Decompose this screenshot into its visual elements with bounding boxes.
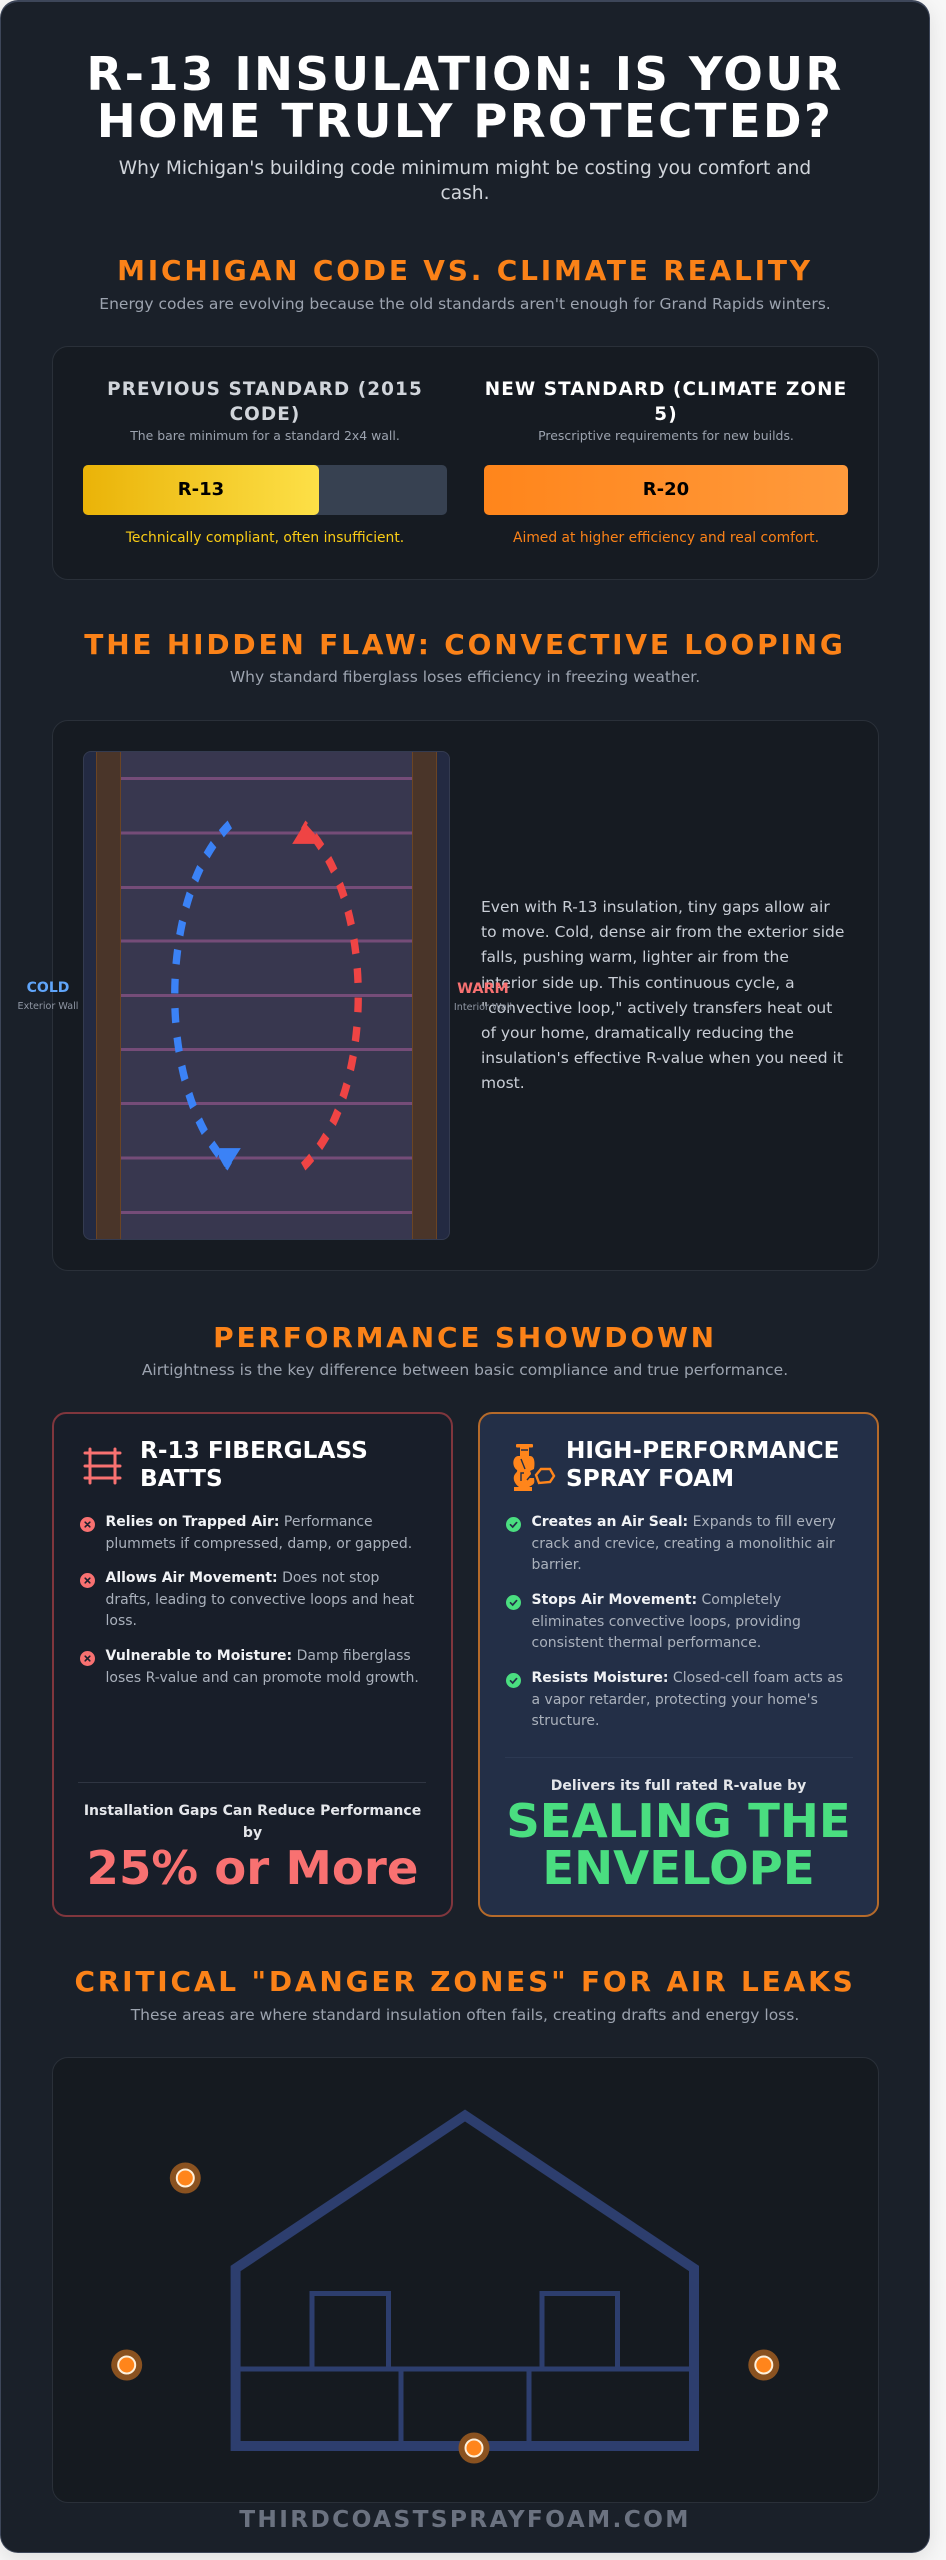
panel: fiberglass card	[52, 1412, 453, 1917]
fiberglass point 1	[80, 1514, 412, 1552]
fiberglass point 2	[80, 1570, 414, 1629]
exterior stud	[96, 751, 121, 1242]
previous standard description: The bare minimum for a standard 2x4 wall.	[130, 428, 400, 443]
leak marker: attic	[170, 2162, 201, 2194]
icon: x mark	[80, 1573, 95, 1588]
fiberglass callout label	[84, 1803, 421, 1841]
interior stud	[412, 751, 437, 1242]
point text: loses R-value and can promote mold growth.	[106, 1670, 419, 1686]
fiberglass card title: BATTS	[140, 1465, 223, 1492]
fiberglass card title	[140, 1437, 368, 1492]
warm air path	[292, 823, 358, 1167]
point text: crack and crevice, creating a monolithic air	[532, 1536, 835, 1552]
leak marker: left wall	[111, 2350, 142, 2380]
icon: spray foam gun	[513, 1444, 556, 1491]
icon: check mark	[506, 1673, 521, 1688]
panel: code comparison	[52, 346, 879, 580]
house outline diagram	[111, 2110, 780, 2464]
spray foam callout statement: SEALING THE	[506, 1794, 851, 1848]
title	[86, 47, 844, 148]
point text: consistent thermal performance.	[532, 1635, 761, 1651]
point text	[532, 1514, 836, 1573]
explanation text	[481, 898, 844, 1092]
panel: house diagram	[52, 2057, 879, 2503]
heading: hidden flaw: THE HIDDEN FLAW: CONVECTIVE LOOPING	[84, 628, 846, 661]
explanation text: Even with R-13 insulation, tiny gaps allow air	[481, 898, 830, 916]
point text: plummets if compressed, damp, or gapped.	[106, 1536, 412, 1552]
label: warm interior	[454, 981, 512, 1013]
point text: structure.	[532, 1713, 599, 1729]
warm word: WARM	[457, 981, 509, 997]
icon: fiberglass batts	[84, 1448, 122, 1484]
leak marker: right wall	[748, 2350, 779, 2380]
previous standard note: Technically compliant, often insufficient.	[126, 530, 404, 546]
spray foam card title	[566, 1437, 839, 1492]
bar: R-20	[484, 465, 848, 515]
point text	[106, 1570, 414, 1629]
heading: danger zones: CRITICAL "DANGER ZONES" FOR AIR LEAKS	[74, 1965, 856, 1998]
new standard heading	[485, 379, 847, 424]
point text	[532, 1670, 843, 1729]
previous standard heading: CODE)	[230, 404, 300, 424]
fiberglass callout label: Installation Gaps Can Reduce Performance	[84, 1803, 421, 1819]
new standard heading: 5)	[654, 404, 678, 424]
explanation text: interior side up. This continuous cycle, a	[481, 974, 795, 992]
explanation text: most.	[481, 1074, 525, 1092]
wall cross-section diagram	[83, 751, 450, 1240]
cold word: COLD	[27, 980, 69, 996]
spray foam point 2	[506, 1592, 801, 1651]
spray foam card title: HIGH-PERFORMANCE	[566, 1437, 839, 1464]
panel: spray foam card	[478, 1412, 879, 1917]
section intro: danger zones: These areas are where standard insulation often fails, creating drafts and energy loss.	[131, 2006, 799, 2024]
footer website: THIRDCOASTSPRAYFOAM.COM	[239, 2506, 691, 2533]
spray foam callout statement	[506, 1794, 851, 1895]
point text: a vapor retarder, protecting your home's	[532, 1692, 818, 1708]
point text	[106, 1648, 419, 1686]
heading: Michigan code: MICHIGAN CODE VS. CLIMATE REALITY	[117, 254, 813, 287]
new standard note: Aimed at higher efficiency and real comfort.	[513, 530, 819, 546]
new standard description: Prescriptive requirements for new builds.	[538, 428, 794, 443]
point text: barrier.	[532, 1557, 582, 1573]
section intro: Michigan code: Energy codes are evolving because the old standards aren't enough for Grand Rapids winters.	[99, 295, 831, 313]
point text: Relies on Trapped Air: Performance	[106, 1514, 373, 1530]
spray foam point 1	[506, 1514, 836, 1573]
explanation text: insulation's effective R-value when you need it	[481, 1049, 843, 1067]
icon: x mark	[80, 1517, 95, 1532]
section intro: performance showdown: Airtightness is the key difference between basic compliance and true performance.	[142, 1361, 788, 1379]
cold air path	[175, 824, 241, 1168]
point text: drafts, leading to convective loops and heat	[106, 1592, 414, 1608]
spray foam callout label: Delivers its full rated R-value by	[551, 1778, 806, 1794]
exterior wall caption: Exterior Wall	[18, 1001, 78, 1012]
explanation text: to move. Cold, dense air from the exterior side	[481, 923, 844, 941]
point text: eliminates convective loops, providing	[532, 1614, 801, 1630]
fiberglass point 3	[80, 1648, 419, 1686]
point text: loss.	[106, 1613, 137, 1629]
point text: Stops Air Movement: Completely	[532, 1592, 781, 1608]
fiberglass lines and airflow	[121, 777, 412, 1214]
label: cold exterior	[18, 980, 78, 1012]
icon: check mark	[506, 1595, 521, 1610]
panel: convective looping	[52, 720, 879, 1271]
title: HOME TRULY PROTECTED?	[97, 94, 833, 148]
fiberglass card title: R-13 FIBERGLASS	[140, 1437, 368, 1464]
new standard heading: NEW STANDARD (CLIMATE ZONE	[485, 379, 847, 400]
explanation text: falls, pushing warm, lighter air from the	[481, 948, 789, 966]
bar: R-20: R-20	[643, 479, 689, 500]
bar fill: R-13: R-13	[178, 479, 224, 500]
point text	[106, 1514, 412, 1552]
icon: check mark	[506, 1517, 521, 1532]
subtitle: Why Michigan's building code minimum might be costing you comfort and	[119, 158, 811, 179]
spray foam callout statement: ENVELOPE	[542, 1841, 815, 1895]
leak marker: foundation	[458, 2432, 490, 2464]
point text: Resists Moisture: Closed-cell foam acts as	[532, 1670, 843, 1686]
point text: Allows Air Movement: Does not stop	[106, 1570, 379, 1586]
point text: Vulnerable to Moisture: Damp fiberglass	[106, 1648, 411, 1664]
explanation text: of your home, dramatically reducing the	[481, 1024, 794, 1042]
previous standard heading: PREVIOUS STANDARD (2015	[107, 379, 423, 400]
section intro: hidden flaw: Why standard fiberglass loses efficiency in freezing weather.	[230, 668, 700, 686]
heading: performance showdown: PERFORMANCE SHOWDOWN	[213, 1321, 717, 1354]
subtitle: cash.	[440, 183, 490, 204]
spray foam card title: SPRAY FOAM	[566, 1465, 734, 1492]
bar: R-13	[83, 465, 447, 515]
point text	[532, 1592, 801, 1651]
bar fill: R-13	[83, 465, 319, 515]
spray foam point 3	[506, 1670, 843, 1729]
previous standard heading	[107, 379, 423, 424]
point text: Creates an Air Seal: Expands to fill every	[532, 1514, 836, 1530]
icon: x mark	[80, 1651, 95, 1666]
subtitle	[119, 158, 811, 204]
insulation cavity	[121, 751, 413, 1242]
fiberglass callout number: 25% or More	[87, 1841, 418, 1895]
fiberglass callout label: by	[243, 1825, 262, 1841]
title: R-13 INSULATION: IS YOUR	[86, 47, 844, 101]
interior wall caption: Interior Wall	[454, 1002, 512, 1013]
explanation text: "convective loop," actively transfers heat out	[481, 999, 832, 1017]
